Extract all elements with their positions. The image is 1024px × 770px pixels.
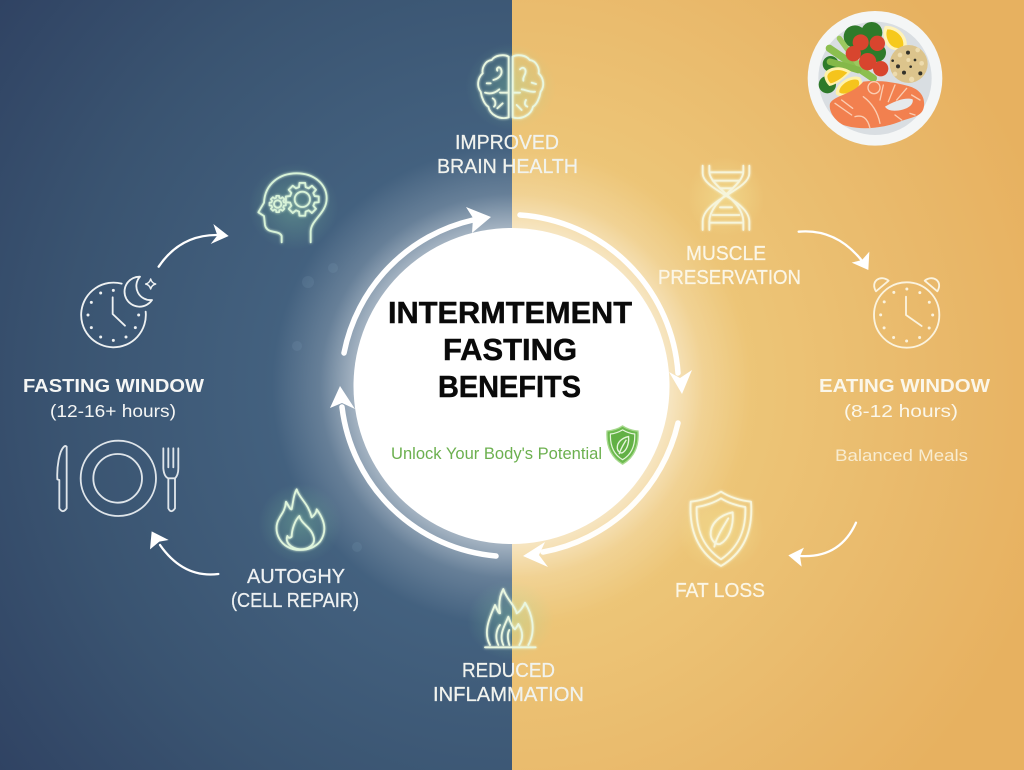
label: autophagy: (CELL REPAIR) <box>231 590 359 612</box>
icon: reduced inflammation flame <box>467 580 554 660</box>
icon: DNA <box>688 157 764 237</box>
label: fasting window: FASTING WINDOW <box>23 375 205 396</box>
cycle arrows <box>330 207 692 567</box>
label: eating window: EATING WINDOW <box>819 375 991 396</box>
centre glow <box>272 146 752 626</box>
label: autophagy: AUTOGHY <box>247 566 345 588</box>
label: reduced inflammation: INFLAMMATION <box>433 684 584 706</box>
icon: green shield <box>607 426 638 464</box>
title <box>388 295 632 404</box>
label: fasting window <box>23 375 205 421</box>
label: improved brain health: BRAIN HEALTH <box>437 156 578 178</box>
label: autophagy <box>231 566 359 612</box>
bokeh lights <box>292 263 362 552</box>
arrow: autophagy to plate <box>150 531 218 574</box>
title: FASTING <box>443 332 577 367</box>
arrow: clock to head <box>159 224 229 267</box>
illustration: plate of food <box>808 11 942 146</box>
title: INTERMTEMENT <box>388 295 632 330</box>
background: eating side <box>512 0 1024 770</box>
label: reduced inflammation: REDUCED <box>462 660 555 682</box>
label: improved brain health: IMPROVED <box>455 132 559 154</box>
title: BENEFITS <box>438 369 581 404</box>
icon: head with gears <box>248 163 338 250</box>
icon: night clock <box>81 277 156 347</box>
background: fasting side <box>0 0 512 770</box>
label: muscle preservation <box>658 243 801 289</box>
label: muscle preservation: MUSCLE <box>686 243 766 265</box>
centre circle <box>354 228 670 544</box>
label: fasting window: (12-16+ hours) <box>50 401 176 421</box>
label: eating window: (8-12 hours) <box>844 401 958 421</box>
icon: plate and cutlery <box>57 441 178 516</box>
arrow: balanced meals to fat loss <box>788 523 856 567</box>
label: eating window <box>819 375 991 421</box>
arrow: muscle to alarm clock <box>799 231 869 270</box>
label: improved brain health <box>437 132 578 178</box>
icon: flame <box>258 483 342 563</box>
label: balanced meals: Balanced Meals <box>835 446 968 465</box>
label: reduced inflammation <box>433 660 584 706</box>
icon: leaf shield <box>678 488 764 572</box>
label: fat loss: FAT LOSS <box>675 580 765 602</box>
label: muscle preservation: PRESERVATION <box>658 267 801 289</box>
icon: alarm clock <box>874 278 939 348</box>
icon: brain <box>466 43 556 130</box>
subtitle: Unlock Your Body's Potential <box>391 445 602 463</box>
